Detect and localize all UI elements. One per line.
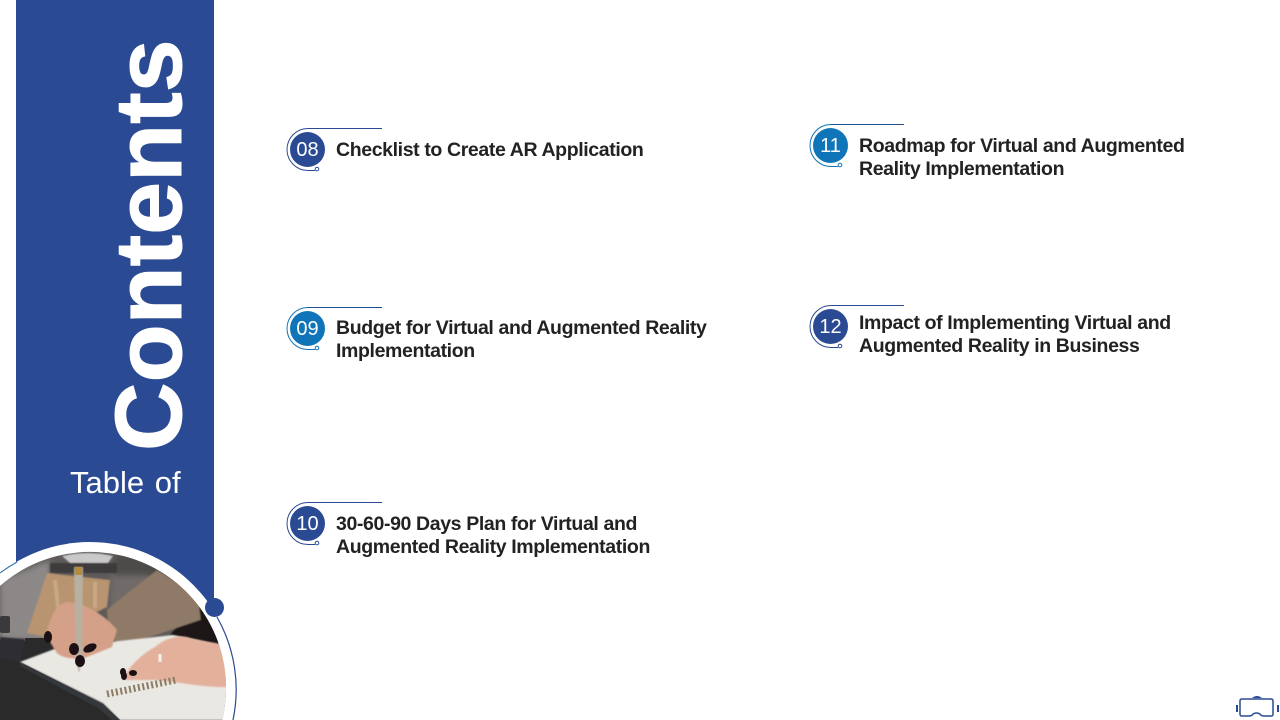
item 10 number badge: 10 [296,513,319,535]
item 12 text [859,312,1171,357]
item 09 text: Implementation [336,340,475,362]
item 08 number badge [286,128,382,172]
panel: blue sidebar [16,0,214,610]
subtitle: Table of: Table of [70,465,181,500]
item 09 number badge: 09 [296,318,319,340]
item 09 text: Budget for Virtual and Augmented Reality [336,317,707,339]
item 09 number badge [286,307,382,350]
item 12 text: Augmented Reality in Business [859,335,1139,357]
item 11 number badge: 11 [820,135,841,157]
item 08 text: Checklist to Create AR Application [336,139,643,161]
item 11 text: Roadmap for Virtual and Augmented [859,135,1184,157]
dot: blue accent [205,598,224,617]
item 08 number badge: 08 [296,139,319,161]
item 12 text: Impact of Implementing Virtual and [859,312,1171,334]
title: Contents: Contents [96,39,202,451]
item 11 text [859,135,1184,180]
photo: hand writing in a notebook [0,542,237,720]
item 12 number badge [810,305,904,348]
item 10 text [336,513,650,558]
item 11 text: Reality Implementation [859,158,1064,180]
item 11 number badge [810,124,904,168]
item 10 number badge [286,502,382,546]
item 10 text: Augmented Reality Implementation [336,536,650,558]
icon: VR headset logo [1236,696,1279,717]
item 12 number badge: 12 [819,316,842,338]
item 09 text [336,317,707,362]
item 10 text: 30-60-90 Days Plan for Virtual and [336,513,637,535]
